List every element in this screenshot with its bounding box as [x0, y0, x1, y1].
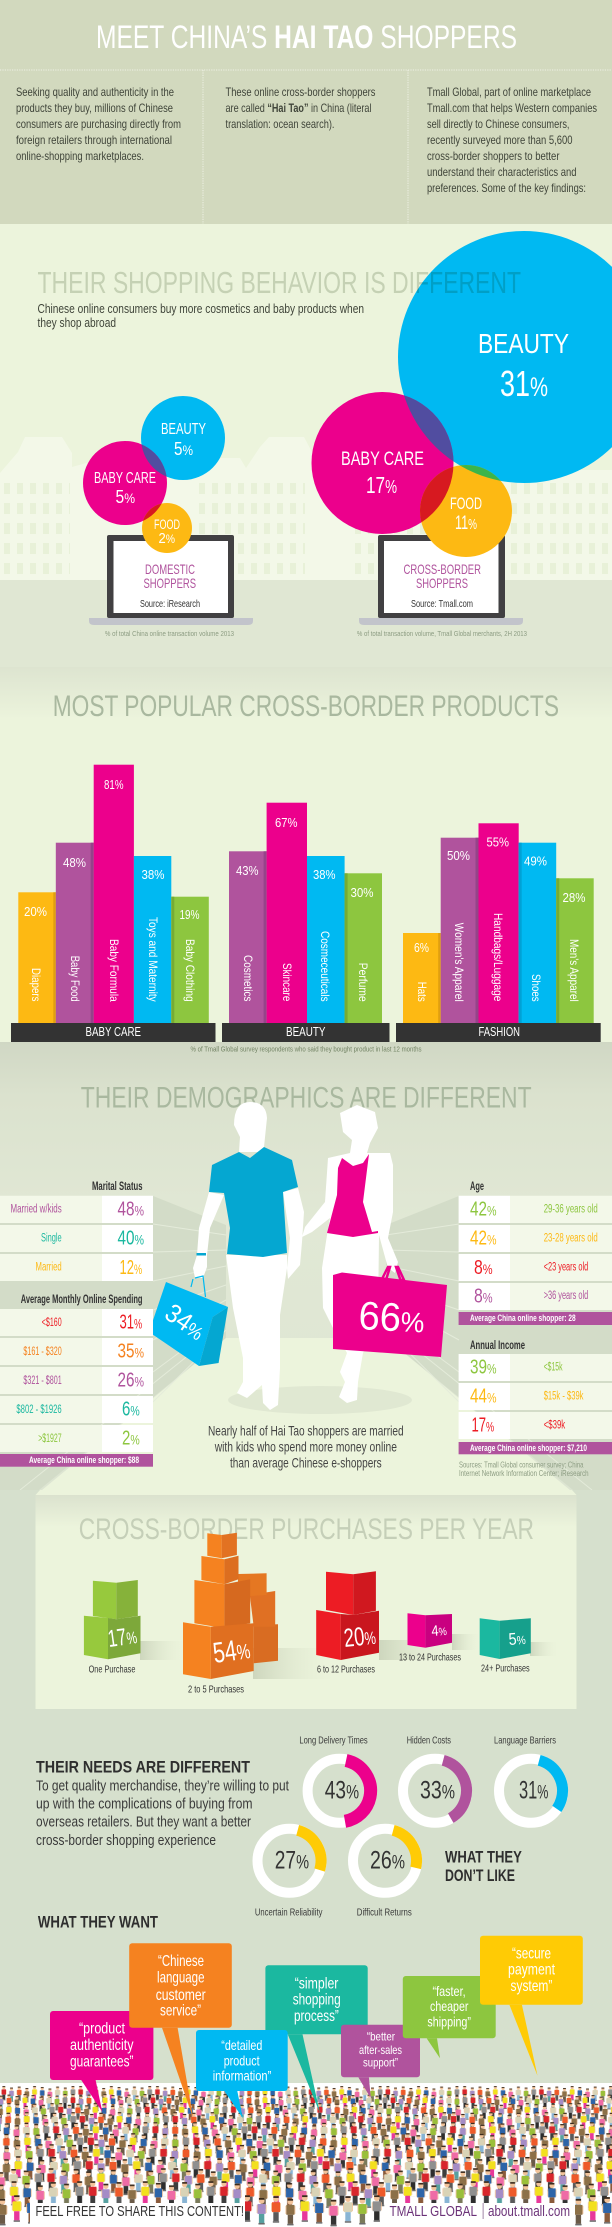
boxes: 6 to 12 purchases	[316, 1571, 379, 1676]
callout: faster shipping	[403, 1976, 496, 2058]
text block: demographics summary: Nearly half of Hai Tao shoppers are married	[208, 1423, 404, 1439]
bubble: baby care cross-border: 17%	[366, 472, 397, 498]
bar chart: beauty: Perfume	[356, 963, 370, 1002]
callout: simpler shopping: shopping	[293, 1991, 341, 2008]
table: marital status: 12%	[120, 1257, 142, 1279]
table: monthly spending: >$1927	[38, 1433, 62, 1445]
text block: intro column 3: understand their characteristics and	[427, 165, 576, 179]
text block: intro column 1	[16, 85, 181, 163]
text block: demographics summary: than average Chinese e-shoppers	[230, 1455, 382, 1471]
laptop: domestic shoppers: DOMESTIC	[145, 561, 195, 577]
bar chart: baby care: Toys and Maternity	[146, 917, 160, 1002]
donut: difficult returns: 26%	[370, 1846, 405, 1874]
donut: hidden costs	[396, 1734, 474, 1829]
bar chart: fashion: Hats	[415, 982, 429, 1002]
boxes: 2 to 5 purchases: 2 to 5 Purchases	[188, 1684, 244, 1696]
callout: secure payment: “secure	[512, 1945, 551, 1962]
figure: man	[193, 1102, 304, 1410]
text block: intro column 2	[226, 85, 376, 131]
donut: uncertain reliability	[251, 1822, 328, 1918]
table: annual income: 39%	[470, 1356, 496, 1378]
table: annual income: $15k - $39k	[544, 1391, 584, 1403]
bar chart: fashion: 55%	[486, 836, 509, 850]
panel: popular products	[0, 667, 612, 1054]
table: age: 42%	[470, 1228, 496, 1250]
bubble: food domestic	[142, 503, 192, 553]
text block: intro column 2: are called “Hai Tao” in China (literal	[226, 101, 372, 115]
donut: language barriers	[492, 1734, 570, 1829]
table: marital status: Married	[36, 1262, 62, 1274]
laptop: cross-border shoppers: CROSS-BORDER	[404, 561, 481, 577]
callout: faster shipping: cheaper	[430, 1998, 469, 2014]
category bar: beauty: BEAUTY	[286, 1024, 326, 1039]
footer url: about.tmall.com	[488, 2203, 570, 2220]
figure: woman	[302, 1105, 398, 1403]
category bar: baby care: BABY CARE	[86, 1024, 141, 1039]
bubble: food cross-border: FOOD	[450, 494, 482, 513]
callout: after-sales support: support”	[363, 2056, 398, 2070]
table: monthly spending: <$160	[42, 1317, 62, 1329]
text block: intro column 1: products they buy, millions of Chinese	[16, 101, 173, 115]
bar chart: fashion	[403, 823, 594, 1023]
callout: chinese language service: language	[157, 1970, 205, 1987]
text block: intro column 2: These online cross-border shoppers	[226, 85, 376, 99]
callout: secure payment	[480, 1936, 583, 2076]
bar chart: beauty: 30%	[350, 886, 374, 900]
table: marital status: 40%	[118, 1228, 144, 1250]
donut: language barriers: 31%	[519, 1776, 548, 1804]
heading: what they don't like	[445, 1847, 522, 1885]
table: marital status: 48%	[118, 1199, 144, 1221]
laptop: cross-border shoppers	[359, 535, 523, 625]
text block: needs: overseas retailers. But they want a better	[36, 1814, 251, 1831]
panel: header	[0, 0, 612, 224]
bubble: food domestic: 2%	[158, 530, 175, 547]
table: marital status: Married w/kids	[10, 1204, 62, 1216]
table: age: 8%	[474, 1285, 493, 1307]
city skyline	[0, 437, 612, 580]
bar chart: fashion: 49%	[524, 855, 547, 869]
panel: demographics	[0, 1042, 612, 1495]
text block: intro column 3: recently surveyed more than 5,600	[427, 133, 573, 147]
text block: shopping behavior	[38, 301, 364, 330]
category bar: beauty	[222, 1023, 390, 1042]
text block: intro column 1: foreign retailers through international	[16, 133, 172, 147]
bubble: food cross-border: 11%	[455, 513, 477, 534]
text block: intro column 1: Seeking quality and authenticity in the	[16, 85, 174, 99]
donut: hidden costs: 33%	[420, 1776, 455, 1804]
table: monthly spending: 35%	[118, 1341, 144, 1363]
caption: domestic source: % of total China online transaction volume 2013	[105, 629, 234, 638]
callout: faster shipping: “faster,	[432, 1983, 466, 1999]
callout: after-sales support: “better	[367, 2030, 395, 2044]
caption: cross-border source: % of total transaction volume, Tmall Global merchants, 2H 2013	[357, 629, 527, 638]
table: monthly spending: 31%	[120, 1312, 142, 1334]
bubble: food domestic: FOOD	[154, 517, 180, 532]
boxes: one purchase: One Purchase	[89, 1664, 136, 1676]
donut: difficult returns: Difficult Returns	[357, 1906, 412, 1918]
callout: after-sales support	[341, 2025, 420, 2098]
table: marital status	[0, 1181, 153, 1281]
bar chart: baby care: 81%	[104, 778, 124, 792]
crowd of shoppers	[0, 2083, 612, 2227]
boxes: 13 to 24 purchases	[399, 1613, 461, 1664]
table: annual income	[459, 1340, 612, 1454]
bar chart: fashion: 6%	[414, 941, 429, 955]
text block: shopping behavior: Chinese online consumers buy more cosmetics and baby products when	[38, 301, 364, 316]
bar chart: baby care: 48%	[63, 856, 86, 870]
heading: what they don't like: DON’T LIKE	[445, 1866, 515, 1885]
boxes: 6 to 12 purchases: 6 to 12 Purchases	[317, 1664, 375, 1676]
table: monthly spending: $161 - $320	[23, 1346, 62, 1358]
boxes: one purchase	[84, 1580, 140, 1676]
laptop: domestic shoppers	[89, 535, 253, 625]
text block: intro column 3	[427, 85, 597, 195]
panel: shopping behavior	[0, 224, 612, 667]
bar chart: baby care: Baby Clothing	[183, 939, 197, 1002]
category bar: baby care	[11, 1023, 216, 1042]
boxes: 13 to 24 purchases: 13 to 24 Purchases	[399, 1652, 461, 1664]
laptop: cross-border shoppers: Source: Tmall.com	[411, 598, 473, 610]
bubble: beauty cross-border: 31%	[500, 363, 548, 404]
table: monthly spending: 2%	[122, 1428, 140, 1450]
table: annual income: <$39k	[544, 1420, 565, 1432]
callout: simpler shopping: “simpler	[295, 1975, 339, 1992]
table: annual income: Annual Income	[470, 1340, 525, 1352]
donut: hidden costs: Hidden Costs	[407, 1734, 451, 1746]
table: annual income: 17%	[472, 1415, 494, 1437]
icon: pink shopping bag	[333, 1267, 447, 1357]
callout: product authenticity: authenticity	[70, 2037, 134, 2054]
table: marital status: Marital Status	[92, 1181, 142, 1193]
bar chart: beauty: Cosmetics	[241, 955, 255, 1002]
callout: product authenticity: “product	[79, 2020, 125, 2037]
text block: needs: To get quality merchandise, they’re willing to put	[36, 1778, 290, 1795]
callout: secure payment: payment	[508, 1961, 555, 1978]
text block: intro column 1: consumers are purchasing directly from	[16, 117, 181, 131]
panel: purchases per year	[0, 1490, 612, 2083]
category bar: fashion	[396, 1023, 601, 1042]
panel: needs	[36, 1734, 570, 1932]
caption: demographics sources	[459, 1459, 589, 1478]
bar chart: beauty: 43%	[236, 864, 258, 878]
heading: their needs: THEIR NEEDS ARE DIFFERENT	[36, 1758, 251, 1777]
bar chart: baby care: 38%	[142, 868, 164, 882]
footer share text: FEEL FREE TO SHARE THIS CONTENT!	[36, 2203, 244, 2220]
bubble: baby care domestic: 5%	[116, 487, 135, 507]
bubble: beauty cross-border: BEAUTY	[478, 328, 569, 359]
icon: pink shopping bag: 66%	[358, 1294, 426, 1341]
table: monthly spending: Average Monthly Online Spending	[21, 1294, 143, 1306]
boxes: one purchase: 17%	[106, 1622, 139, 1653]
bubble: food cross-border	[420, 465, 512, 557]
callout: chinese language service: “Chinese	[158, 1953, 204, 1970]
boxes: 2 to 5 purchases	[183, 1533, 278, 1696]
icon: blue shopping bag: 34%	[160, 1297, 211, 1346]
text block: shopping behavior: they shop abroad	[38, 315, 116, 330]
donut: uncertain reliability: 27%	[275, 1846, 309, 1874]
donut: uncertain reliability: Uncertain Reliability	[255, 1906, 323, 1918]
bar chart: fashion: 28%	[562, 891, 586, 905]
laptop: domestic shoppers: SHOPPERS	[144, 575, 196, 591]
bar chart: beauty: 38%	[313, 868, 336, 882]
category bar: fashion: FASHION	[478, 1024, 520, 1039]
text block: demographics summary: with kids who spend more money online	[214, 1439, 397, 1455]
callout: chinese language service	[129, 1943, 232, 2118]
text block: needs: cross-border shopping experience	[36, 1832, 216, 1849]
bar chart: fashion: 50%	[447, 849, 470, 863]
text block: demographics summary	[208, 1423, 404, 1471]
text block: needs	[36, 1778, 290, 1849]
bubble: baby care domestic	[83, 441, 167, 525]
callout: detailed information: information”	[213, 2067, 272, 2083]
bar chart: baby care: Diapers	[29, 968, 43, 1002]
callout: product authenticity: guarantees”	[70, 2054, 134, 2071]
caption: product survey: % of Tmall Global survey respondents who said they bought product in last 12 months	[190, 1045, 422, 1054]
table: annual income: <$15k	[544, 1362, 563, 1374]
table: monthly spending: $321 - $801	[23, 1375, 62, 1387]
laptop: domestic shoppers: Source: iResearch	[140, 598, 200, 610]
table: age: 8%	[474, 1257, 493, 1279]
donut: language barriers: Language Barriers	[494, 1734, 556, 1746]
donut: long delivery times: 43%	[325, 1776, 359, 1804]
boxes: 6 to 12 purchases: 20%	[342, 1620, 377, 1653]
callout: detailed information: product	[224, 2052, 260, 2068]
laptop: cross-border shoppers: SHOPPERS	[416, 575, 468, 591]
bar chart: fashion: Shoes	[529, 974, 543, 1002]
table: age: 42%	[470, 1199, 496, 1221]
table: monthly spending	[0, 1294, 153, 1467]
bubble: baby care cross-border	[312, 392, 454, 534]
text block: intro column 3: cross-border shoppers to better	[427, 149, 560, 163]
text block: intro column 2: translation: ocean search).	[226, 117, 334, 131]
bubble: beauty domestic: 5%	[174, 439, 193, 459]
callout: after-sales support: after-sales	[359, 2043, 402, 2057]
bar chart: fashion: Men's Apparel	[567, 939, 581, 1002]
text block: intro column 3: sell directly to Chinese consumers,	[427, 117, 570, 131]
bar chart: baby care	[18, 765, 209, 1023]
table: age: >36 years old	[544, 1290, 588, 1302]
table: age: <23 years old	[544, 1262, 588, 1274]
callout: faster shipping: shipping”	[427, 2014, 471, 2030]
donut: long delivery times: Long Delivery Times	[299, 1734, 368, 1746]
callout: detailed information: “detailed	[221, 2037, 262, 2053]
bar chart: beauty	[229, 803, 382, 1023]
bar chart: baby care: 19%	[180, 908, 200, 922]
callout: simpler shopping	[265, 1965, 368, 2113]
bubble: beauty cross-border	[398, 231, 612, 483]
bar chart: beauty: Skincare	[280, 963, 294, 1002]
bar chart: baby care: Baby Formula	[107, 939, 121, 1002]
logo: tmall global: TMALL GLOBAL	[390, 2203, 477, 2220]
table: monthly spending: Average China online shopper: $88	[29, 1455, 139, 1466]
callout: detailed information	[196, 2030, 288, 2118]
callout: chinese language service: customer	[156, 1987, 206, 2004]
heading: what they don't like: WHAT THEY	[445, 1847, 522, 1866]
boxes: 2 to 5 purchases: 54%	[211, 1633, 252, 1670]
boxes: 24+ purchases: 24+ Purchases	[481, 1663, 530, 1675]
boxes: 24+ purchases	[480, 1618, 531, 1675]
callout: chinese language service: service”	[160, 2003, 201, 2020]
heading: what they want: WHAT THEY WANT	[38, 1914, 158, 1932]
table: annual income: 44%	[470, 1385, 496, 1407]
bubble: baby care cross-border: BABY CARE	[341, 449, 424, 470]
donut: difficult returns	[346, 1822, 424, 1918]
boxes: 24+ purchases: 5%	[508, 1629, 527, 1649]
table: monthly spending: $802 - $1926	[16, 1404, 62, 1416]
text block: intro column 1: online-shopping marketplaces.	[16, 149, 144, 163]
table: monthly spending: 26%	[118, 1370, 144, 1392]
bubble: baby care domestic: BABY CARE	[94, 470, 156, 487]
callout: simpler shopping: process”	[294, 2008, 339, 2025]
text block: needs: up with the complications of buying from	[36, 1796, 252, 1813]
callout: secure payment: system”	[510, 1978, 552, 1995]
table: monthly spending: 6%	[122, 1399, 140, 1421]
bar chart: fashion: Women's Apparel	[452, 923, 466, 1002]
bar chart: beauty: Cosmeceuticals	[318, 931, 332, 1002]
boxes: 13 to 24 purchases: 4%	[431, 1622, 448, 1640]
title: MEET CHINA’S HAI TAO SHOPPERS	[96, 19, 517, 55]
bar chart: baby care: Baby Food	[68, 956, 82, 1002]
bar chart: baby care: 20%	[24, 905, 47, 919]
footer	[30, 2203, 575, 2227]
table: age	[459, 1181, 612, 1325]
bar chart: beauty: 67%	[275, 816, 298, 830]
donut: long delivery times	[299, 1734, 376, 1828]
callout: product authenticity	[50, 2011, 153, 2112]
table: age: Age	[470, 1181, 484, 1193]
bubble: beauty domestic: BEAUTY	[161, 421, 206, 438]
icon: blue shopping bag	[149, 1276, 228, 1366]
bubble: beauty domestic	[141, 396, 225, 480]
bar chart: fashion: Handbags/Luggage	[491, 913, 505, 1002]
table: marital status: Single	[41, 1233, 62, 1245]
